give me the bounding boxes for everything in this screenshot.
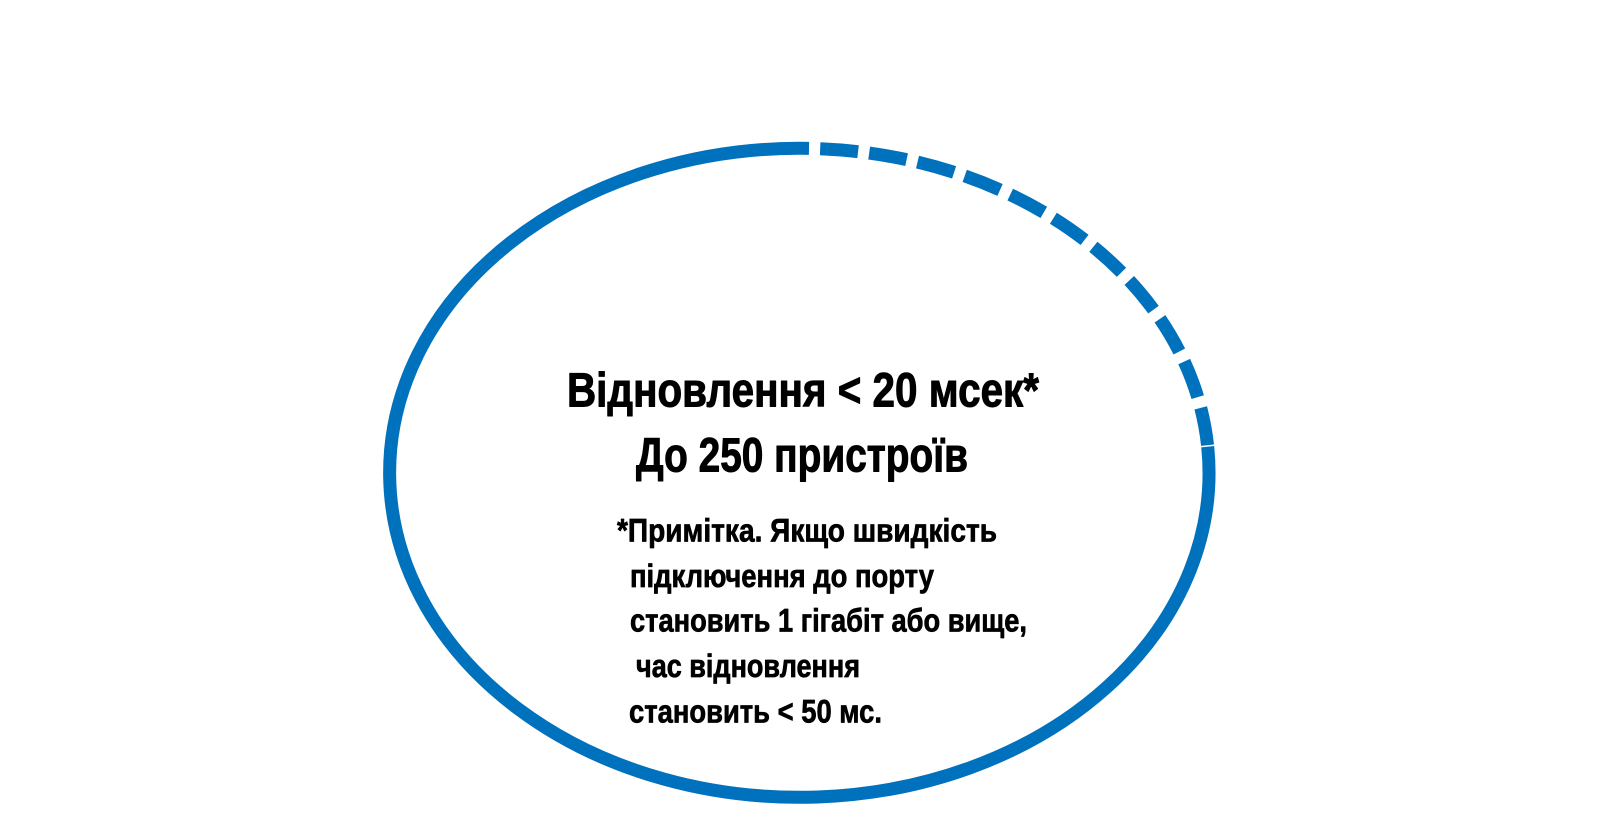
footnote line 3: становить 1 гігабіт або вище,	[630, 603, 1027, 639]
footnote line 5: становить < 50 мс.	[629, 694, 882, 730]
solid arc	[390, 148, 1209, 797]
heading line 2: До 250 пристроїв	[636, 430, 968, 483]
heading line 1: Відновлення < 20 мсек*	[567, 365, 1039, 418]
footnote line 1: *Примітка. Якщо швидкість	[617, 513, 997, 549]
dashed arc	[809, 148, 1208, 447]
heading	[567, 365, 1039, 483]
ellipse: solid and dashed outline	[390, 148, 1209, 797]
footnote line 2: підключення до порту	[630, 558, 934, 594]
footnote line 4: час відновлення	[636, 648, 860, 684]
footnote	[617, 513, 1027, 730]
